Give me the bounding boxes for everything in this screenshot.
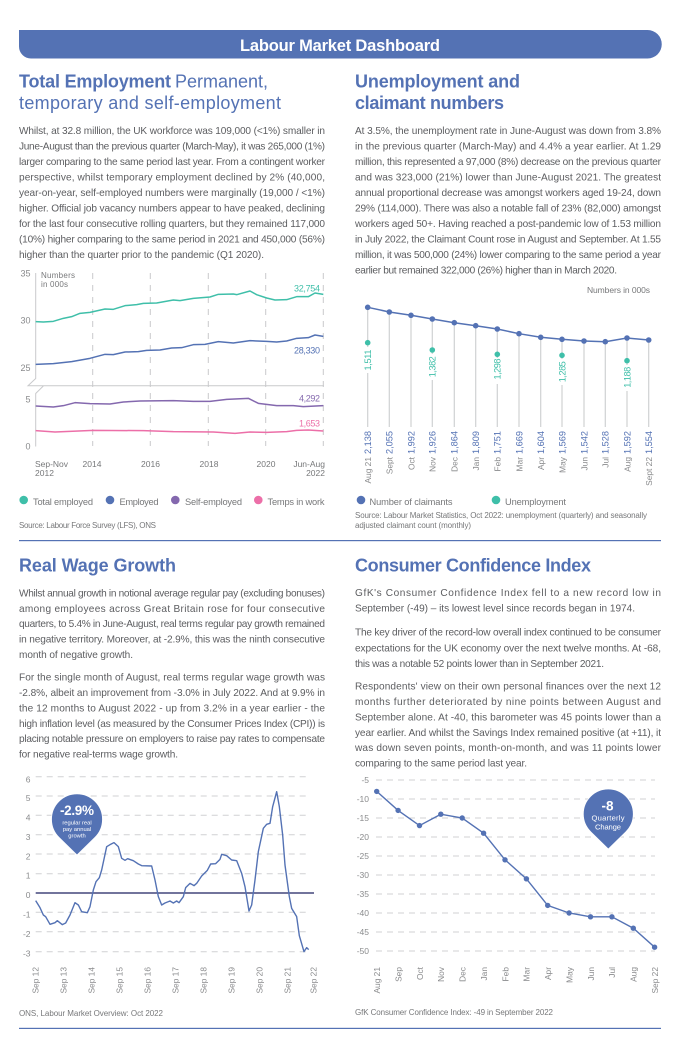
text block: consumer confidence commentary	[354, 588, 662, 770]
text block: total employment commentary: larger comparing to the same period last year. From a contingent worker	[19, 157, 326, 168]
lollipop chart: claimants and unemployment: 1,864	[450, 431, 460, 454]
source note: unemployment: adjusted claimant count (monthly)	[355, 521, 471, 530]
line chart: consumer confidence: -40	[357, 908, 369, 918]
lollipop chart: claimants and unemployment	[362, 285, 654, 486]
line chart: employment numbers	[20, 268, 325, 478]
heading: consumer confidence index: Consumer Confidence Index	[355, 556, 591, 576]
line chart: real wage growth: Sep 16	[142, 967, 152, 994]
lollipop chart: claimants and unemployment: 1,382	[428, 356, 438, 377]
lollipop chart: claimants and unemployment: Sept 22	[644, 457, 654, 486]
line chart: consumer confidence: Jun	[586, 967, 596, 981]
text block: real wage commentary: Whilst annual growth in notional average regular pay (excluding bonuses)	[19, 588, 325, 600]
callout: -2.9% regular real pay annual growth: pay annual	[63, 827, 91, 833]
line chart: consumer confidence: Mar	[522, 967, 532, 981]
lollipop chart: claimants and unemployment: 1,592	[622, 431, 632, 454]
line chart: consumer confidence: -30	[357, 870, 369, 880]
lollipop chart: claimants and unemployment: 2,138	[363, 431, 373, 454]
line chart: consumer confidence: Nov	[436, 966, 446, 982]
line chart: employment numbers: in 000s	[41, 280, 68, 289]
lollipop chart: claimants and unemployment: 1,669	[514, 431, 524, 454]
line chart: real wage growth: Sep 22	[309, 967, 319, 994]
heading: total employment: temporary and self-employment	[19, 93, 281, 113]
line chart: real wage growth: 6	[26, 774, 31, 784]
line chart: consumer confidence: Apr	[543, 967, 553, 980]
legend: employment series: Total employed	[33, 497, 93, 507]
divider: page bottom	[19, 1028, 661, 1029]
lollipop chart: claimants and unemployment: 1,285	[557, 361, 567, 382]
text block: consumer confidence commentary: expectations for the UK economy over the next twelve months. At -68,	[355, 644, 661, 654]
source note: consumer confidence: GfK Consumer Confidence Index: -49 in September 2022	[355, 1008, 554, 1017]
text block: real wage commentary: the 12 months to August 2022 - up from 3.2% in a year earlier - the	[19, 704, 325, 714]
line chart: real wage growth: Sep 19	[226, 967, 236, 994]
line chart: consumer confidence: Sep	[393, 967, 403, 982]
lollipop chart: claimants and unemployment: Jun	[579, 457, 589, 471]
callout: -8 quarterly change	[583, 789, 633, 849]
lollipop chart: claimants and unemployment: 1,188	[622, 367, 632, 388]
text block: consumer confidence commentary: The key driver of the record-low overall index continued to be consumer	[355, 628, 662, 638]
line chart: real wage growth: Sep 20	[254, 967, 264, 994]
text block: consumer confidence commentary: was down seven points, month-on-month, and was 11 points lower	[354, 743, 662, 754]
text block: unemployment commentary	[354, 126, 662, 276]
text block: total employment commentary: for the last four consecutive rolling quarters, but they remained 117,000	[19, 219, 325, 230]
heading: unemployment: Unemployment and	[355, 72, 520, 92]
line chart: employment numbers: 5	[25, 394, 30, 404]
line chart: consumer confidence: Jan	[479, 967, 489, 981]
line chart: real wage growth: 2	[26, 852, 31, 862]
text block: real wage commentary: in negative territory. Moreover, at -2.9%, this was the ninth consecutive	[19, 634, 325, 646]
line chart: consumer confidence: -50	[357, 946, 369, 956]
text block: unemployment commentary: million, this represented a 97,000 (8%) decrease on the previous quarter	[355, 157, 662, 168]
lollipop chart: claimants and unemployment: Feb	[493, 457, 503, 471]
line chart: consumer confidence: Dec	[458, 967, 468, 982]
line chart: real wage growth: -2	[23, 929, 31, 939]
text block: consumer confidence commentary: this was a notable 52 points lower than in September 2021.	[355, 659, 604, 670]
line chart: employment numbers: 1,653	[299, 418, 320, 428]
title banner: Labour Market Dashboard: Labour Market Dashboard	[240, 37, 440, 55]
lollipop chart: claimants and unemployment: 1,511	[363, 350, 373, 370]
line chart: consumer confidence	[357, 775, 660, 994]
lollipop chart: claimants and unemployment: Aug	[622, 457, 632, 472]
line chart: consumer confidence: Feb	[500, 967, 510, 981]
text block: consumer confidence commentary: September (-49) – its lowest level since records began in 1974.	[355, 604, 635, 614]
lollipop chart: claimants and unemployment: 1,992	[406, 431, 416, 454]
line chart: consumer confidence: -45	[357, 927, 369, 937]
lollipop chart: claimants and unemployment: Jan	[471, 457, 481, 471]
callout: -2.9% regular real pay annual growth: growth	[68, 834, 86, 840]
text block: total employment commentary: (10%) higher comparing to the same period in 2021 and 450,000 (56%)	[19, 234, 325, 246]
line chart: employment numbers: Sep-Nov	[35, 459, 69, 469]
heading: unemployment: claimant numbers	[355, 93, 504, 113]
lollipop chart: claimants and unemployment: Nov	[428, 456, 438, 472]
line chart: employment numbers: 30	[20, 316, 30, 326]
text block: real wage commentary: quarters, to 5.4% in June-August, real terms regular pay growth remained	[19, 619, 325, 630]
lollipop chart: claimants and unemployment: 1,809	[471, 431, 481, 454]
text block: unemployment commentary: 29% (114,000). There was also a notable fall of 23% (82,000) amongst	[355, 204, 661, 214]
lollipop chart: claimants and unemployment: Mar	[514, 457, 524, 471]
line chart: consumer confidence: Aug	[629, 967, 639, 982]
line chart: employment numbers: 32,754	[294, 284, 320, 294]
line chart: employment numbers: 2018	[200, 459, 219, 469]
source note: real wage: ONS, Labour Market Overview: Oct 2022	[19, 1009, 164, 1018]
panel: consumer confidence index	[354, 556, 662, 1017]
text block: total employment commentary: higher. Official job vacancy numbers appear to have peaked, declining	[19, 204, 325, 214]
source note: unemployment	[355, 511, 647, 530]
lollipop chart: claimants and unemployment: May	[557, 456, 567, 473]
lollipop chart: claimants and unemployment: 1,528	[601, 431, 611, 454]
line chart: real wage growth: Sep 12	[30, 967, 40, 994]
heading: total employment: Total Employment	[19, 72, 171, 92]
text block: real wage commentary	[19, 588, 325, 760]
text block: total employment commentary: perspective, whilst temporary employment declined by 2% (40,000,	[19, 172, 325, 184]
source note: unemployment: Source: Labour Market Statistics, Oct 2022: unemployment (quarterly) and seasonally	[355, 511, 647, 520]
line chart: consumer confidence: Oct	[415, 966, 425, 980]
text block: unemployment commentary: in July 2022, the Claimant Count rose in August and September. At 1.55	[355, 234, 661, 246]
line chart: employment numbers: 0	[25, 442, 30, 452]
line chart: real wage growth: 4	[26, 812, 31, 822]
line chart: real wage growth: 0	[26, 890, 31, 900]
lollipop chart: claimants and unemployment: Aug 21	[363, 457, 373, 484]
text block: total employment commentary: June-August than the previous quarter (March-May), it was 265,000 (1%)	[19, 142, 325, 152]
text block: consumer confidence commentary: September alone. At -40, this barometer was 45 points lower than a	[355, 712, 661, 724]
lollipop chart: claimants and unemployment: 1,751	[493, 431, 503, 454]
text block: consumer confidence commentary: Respondents' view on their own personal finances over the next 12	[355, 682, 661, 692]
callout: -8 quarterly change: Change	[595, 822, 621, 832]
line chart: consumer confidence: Jul	[607, 967, 617, 978]
line chart: employment numbers: 2016	[141, 459, 160, 469]
line chart: real wage growth: Sep 14	[86, 967, 96, 994]
line chart: real wage growth: Sep 13	[58, 967, 68, 994]
text block: real wage commentary: for negative real-terms wage growth.	[19, 750, 178, 760]
line chart: real wage growth: Sep 15	[114, 967, 124, 994]
line chart: real wage growth: Sep 17	[170, 967, 180, 994]
line chart: consumer confidence: Aug 21	[372, 967, 382, 994]
text block: unemployment commentary: workers aged 50+. Having reached a post-pandemic low of 1.53 million	[354, 219, 661, 230]
lollipop chart: claimants and unemployment: 1,542	[579, 431, 589, 454]
line chart: consumer confidence: -25	[357, 851, 369, 861]
line chart: employment numbers: 2014	[83, 459, 102, 469]
legend: claimants and unemployment	[357, 496, 566, 507]
text block: unemployment commentary: million, it was 500,000 (24%) lower comparing to the same period a year	[355, 250, 662, 261]
text block: unemployment commentary: annual proportional decrease was amongst workers aged 19-24, down	[355, 188, 661, 199]
heading: real wage growth: Real Wage Growth	[19, 556, 176, 576]
line chart: real wage growth: 3	[26, 832, 31, 842]
line chart: consumer confidence: May	[564, 966, 574, 983]
line chart: real wage growth: 5	[26, 793, 31, 803]
line chart: employment numbers: 4,292	[299, 394, 320, 404]
line chart: employment numbers: 2022	[306, 468, 325, 478]
legend: employment series: Temps in work	[268, 497, 325, 507]
text block: consumer confidence commentary: year earlier. And whilst the Savings Index remained positive (at +11), it	[355, 728, 661, 739]
lollipop chart: claimants and unemployment: Numbers in 000s	[587, 285, 650, 295]
text block: unemployment commentary: and was 323,000 (21%) lower than June-August 2021. The greatest	[355, 172, 661, 184]
callout: -2.9% regular real pay annual growth: regular real	[62, 820, 92, 826]
lollipop chart: claimants and unemployment: 1,926	[428, 431, 438, 454]
lollipop chart: claimants and unemployment: Dec	[450, 457, 460, 472]
lollipop chart: claimants and unemployment: 1,569	[557, 431, 567, 454]
text block: unemployment commentary: in the previous quarter (March-May) and 4.4% a year earlier. At 1.29	[355, 142, 661, 152]
source note: employment: Source: Labour Force Survey (LFS), ONS	[19, 521, 156, 530]
title banner: Labour Market Dashboard	[19, 30, 662, 58]
text block: total employment commentary: higher than the quarter prior to the pandemic (Q1 2020).	[19, 250, 264, 261]
line chart: consumer confidence: -10	[357, 794, 369, 804]
callout: -8 quarterly change: -8	[601, 798, 614, 814]
text block: unemployment commentary: At 3.5%, the unemployment rate in June-August was down from 3.8%	[355, 126, 661, 137]
callout: -2.9% regular real pay annual growth: -2.9%	[60, 803, 94, 818]
text block: total employment commentary	[19, 126, 326, 261]
text block: real wage commentary: high inflation level (as measured by the Consumer Prices Index (CPI)) is	[19, 719, 325, 730]
heading: total employment: Permanent,	[175, 72, 268, 92]
panel: real wage growth	[19, 556, 325, 1018]
line chart: real wage growth: Sep 18	[198, 967, 208, 994]
text block: consumer confidence commentary: months further deteriorated by nine points between August and	[355, 697, 661, 708]
text block: consumer confidence commentary: GfK's Consumer Confidence Index fell to a new record low in	[355, 588, 661, 599]
text block: real wage commentary: For the single month of August, real terms regular wage growth was	[19, 672, 325, 684]
line chart: consumer confidence: Sep 22	[650, 967, 660, 994]
line chart: consumer confidence: -15	[357, 813, 369, 823]
line chart: employment numbers: 35	[20, 268, 30, 278]
panel: total employment	[19, 72, 326, 530]
text block: consumer confidence commentary: comparing to the same period last year.	[355, 758, 527, 770]
lollipop chart: claimants and unemployment: Apr	[536, 457, 546, 470]
text block: real wage commentary: month of negative growth.	[19, 650, 133, 661]
text block: total employment commentary: year-on-year, self-employed numbers were marginally (19,000 / <1%)	[19, 188, 325, 199]
legend: employment series: Employed	[120, 497, 158, 507]
heading: unemployment	[355, 72, 520, 113]
line chart: real wage growth: -1	[23, 910, 31, 920]
lollipop chart: claimants and unemployment: 1,298	[493, 358, 503, 380]
line chart: consumer confidence: -5	[361, 775, 369, 785]
line chart: employment numbers: Numbers	[41, 271, 75, 280]
line chart: employment numbers: 28,330	[294, 346, 320, 356]
legend: employment series: Self-employed	[185, 497, 242, 507]
line chart: employment numbers: 2012	[35, 468, 54, 478]
legend: claimants and unemployment: Unemployment	[505, 497, 566, 507]
line chart: real wage growth: Sep 21	[282, 967, 292, 994]
lollipop chart: claimants and unemployment: Jul	[601, 457, 611, 468]
line chart: real wage growth	[23, 774, 319, 994]
line chart: real wage growth: 1	[26, 870, 31, 880]
text block: unemployment commentary: earlier but remained 322,000 (26%) higher than in March 2020.	[355, 266, 617, 276]
legend: employment series	[19, 496, 325, 507]
lollipop chart: claimants and unemployment: Sept	[385, 456, 395, 474]
lollipop chart: claimants and unemployment: 2,055	[385, 431, 395, 454]
callout: -8 quarterly change: Quarterly	[592, 814, 625, 822]
heading: total employment	[19, 72, 281, 113]
line chart: employment numbers: 2020	[257, 459, 276, 469]
text block: real wage commentary: among employees across Great Britain rose for four consecutive	[19, 604, 325, 615]
text block: real wage commentary: -2.8%, albeit an improvement from -3.0% in July 2022. And at 9.9% in	[19, 688, 325, 699]
line chart: real wage growth: -3	[23, 948, 31, 958]
lollipop chart: claimants and unemployment: 1,604	[536, 431, 546, 454]
lollipop chart: claimants and unemployment: 1,554	[644, 431, 654, 454]
line chart: employment numbers: Jun-Aug	[293, 459, 325, 469]
text block: total employment commentary: Whilst, at 32.8 million, the UK workforce was 109,000 (<1%) smaller in	[19, 126, 325, 137]
panel: unemployment	[354, 72, 662, 530]
divider: upper and lower sections	[19, 540, 661, 541]
text block: real wage commentary: placing notable pressure on employers to raise pay rates to compensate	[19, 734, 325, 745]
callout: -2.9% regular real pay annual growth	[52, 794, 103, 855]
line chart: consumer confidence: -20	[357, 832, 369, 842]
legend: claimants and unemployment: Number of claimants	[370, 497, 453, 507]
line chart: employment numbers: 25	[20, 363, 30, 373]
line chart: consumer confidence: -35	[357, 889, 369, 899]
lollipop chart: claimants and unemployment: Oct	[406, 456, 416, 470]
